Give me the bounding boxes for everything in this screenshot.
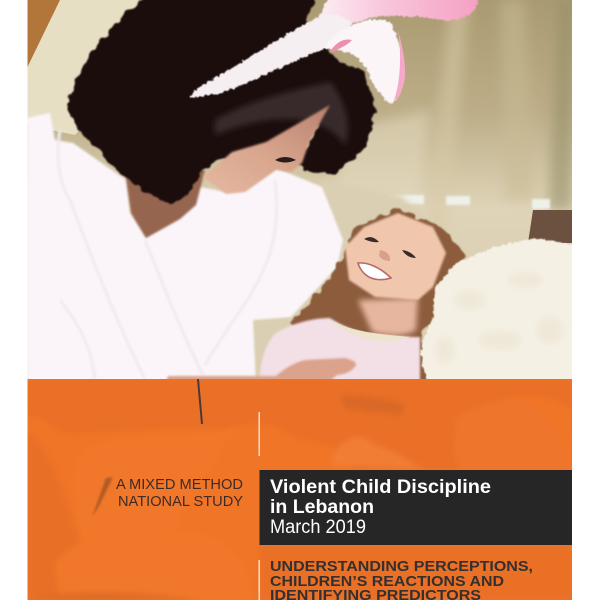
teddy bear xyxy=(420,238,572,379)
mother's eye xyxy=(275,157,296,162)
shirt collar xyxy=(332,320,410,342)
subtitle: study type: A MIXED METHOD xyxy=(116,476,243,493)
bunny ear pink top xyxy=(318,0,480,26)
tagline xyxy=(270,558,533,600)
child's shirt xyxy=(260,318,420,385)
background: curtain wall xyxy=(28,0,572,379)
mother's neck xyxy=(125,170,205,238)
title block xyxy=(260,470,572,545)
child's neck xyxy=(358,298,418,336)
cream headboard xyxy=(28,0,143,135)
orange duotone photo shadows xyxy=(32,392,416,600)
tagline: UNDERSTANDING PERCEPTIONS, xyxy=(270,558,533,575)
window highlights xyxy=(388,195,550,209)
subtitle: study type: NATIONAL STUDY xyxy=(118,493,243,510)
curtain folds xyxy=(338,0,572,220)
bunny ear white flap xyxy=(322,19,403,104)
title text: Violent Child Discipline xyxy=(270,477,491,498)
brown wall corner xyxy=(27,0,60,68)
cream area behind child xyxy=(257,194,412,372)
child's smile xyxy=(358,263,391,280)
robe folds xyxy=(58,130,277,379)
photo: mother and child xyxy=(27,0,585,400)
dark hairline xyxy=(197,379,203,424)
child's eyes xyxy=(364,237,416,258)
mother's hair xyxy=(66,0,377,205)
divider: lower white rule xyxy=(258,560,260,600)
bunny ear band xyxy=(191,15,352,98)
divider: upper white rule xyxy=(258,412,260,456)
dark furniture xyxy=(528,210,572,243)
subtitle: study type xyxy=(116,476,243,510)
orange panel xyxy=(27,379,572,600)
child's nose xyxy=(379,250,390,261)
date: March 2019 xyxy=(270,517,366,538)
title block: in Lebanon xyxy=(270,497,374,518)
mother's hand xyxy=(166,356,358,379)
child's face xyxy=(345,213,446,300)
teddy fur shading xyxy=(435,272,564,364)
hair highlights xyxy=(215,82,348,145)
dark crease in blanket xyxy=(92,477,113,517)
white robe xyxy=(27,113,343,390)
child's hair xyxy=(291,208,466,395)
mother's face xyxy=(203,105,330,194)
tagline: CHILDREN’S REACTIONS AND xyxy=(270,573,504,590)
ear pink lining xyxy=(330,40,352,52)
